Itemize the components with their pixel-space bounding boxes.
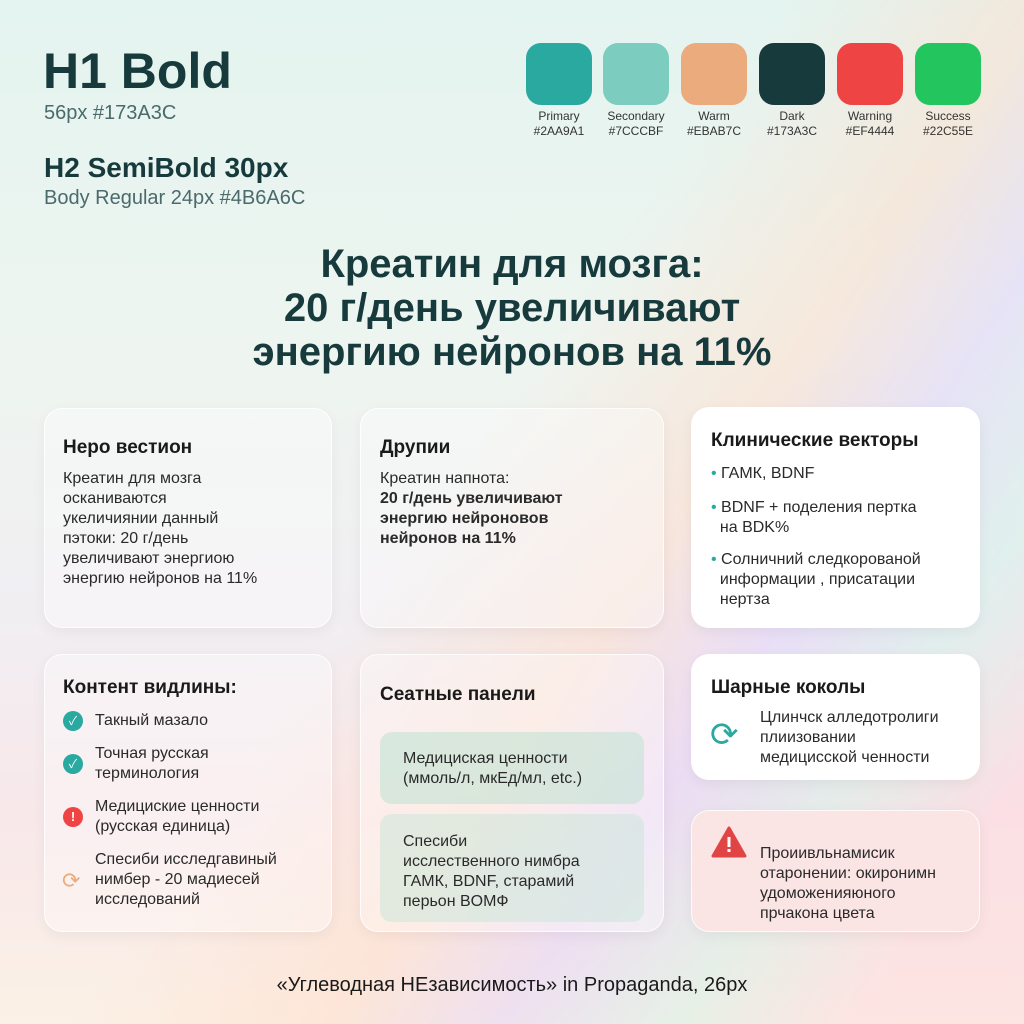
icon: refresh teal: ⟳	[710, 716, 738, 754]
inner panel 1: Медициская ценности	[403, 750, 568, 767]
panel: Контент видлины: (русская единица)	[95, 818, 230, 835]
palette swatches: Success	[925, 109, 971, 123]
panel: Сеатные панели: Сеатные панели	[380, 684, 536, 705]
inner panel 2: ГАМК, BDNF, старамий	[403, 873, 574, 890]
heading: H2 sample: H2 SemiBold 30px	[44, 152, 288, 183]
icon: check	[63, 754, 83, 774]
palette swatches: Secondary	[607, 109, 665, 123]
palette swatches: #22C55E	[923, 124, 973, 138]
palette swatches: #EF4444	[846, 124, 894, 138]
palette swatches	[526, 43, 981, 138]
panel: Контент видлины: Медициские ценности	[95, 798, 259, 815]
palette swatches: Dark	[779, 109, 805, 123]
palette swatches: #7CCCBF	[609, 124, 663, 138]
panel: Шарные коколы	[691, 654, 980, 780]
panel: Клинические векторы: • ГАМК, BDNF	[711, 465, 814, 482]
panel: Шарные коколы: плиизовании	[760, 729, 856, 746]
panel: Клинические векторы: Клинические векторы	[711, 430, 918, 451]
title: 20 г/день увеличивают	[284, 286, 740, 330]
panel: Шарные коколы: Шарные коколы	[711, 677, 865, 698]
panel: Неро вестион: пэтоки: 20 г/день	[63, 530, 188, 547]
panel: Неро вестион: укеличиянии данный	[63, 510, 218, 527]
panel: Контент видлины: Контент видлины:	[63, 677, 237, 698]
icon: alert	[63, 807, 83, 827]
panel: Контент видлины: нимбер - 20 мадиесей	[95, 871, 260, 888]
icon: alert: !	[71, 809, 75, 824]
text: H1 spec: 56px #173A3C	[44, 102, 176, 124]
icon: warning triangle	[712, 826, 747, 858]
panel: Неро вестион	[44, 408, 332, 628]
panel: Клинические векторы: информации , присатации	[720, 571, 915, 588]
heading: H1 sample: H1 Bold	[43, 43, 232, 99]
panel: warning: удоможенияюного	[760, 885, 896, 902]
panel: Контент видлины	[44, 654, 332, 932]
panel: Клинические векторы: • Солничний следкорованой	[711, 551, 921, 568]
icon: check	[63, 711, 83, 731]
panel: Контент видлины: терминология	[95, 765, 199, 782]
footer: «Углеводная НЕзависимость» in Propaganda, 26px	[277, 974, 747, 996]
panel: Шарные коколы: медицисской ченности	[760, 749, 929, 766]
palette swatches: Warning	[848, 109, 892, 123]
panel: Контент видлины: Такный мазало	[95, 712, 208, 729]
inner panel 2	[380, 814, 644, 922]
panel: Сеатные панели	[360, 654, 664, 932]
palette swatches: #2AA9A1	[534, 124, 584, 138]
title: Креатин для мозга:	[320, 242, 704, 286]
panel: Клинические векторы	[691, 407, 980, 628]
panel: Друпии: Друпии	[380, 437, 450, 458]
panel: warning: прчакона цвета	[760, 905, 875, 922]
panel: Неро вестион: увеличивают энергиою	[63, 550, 234, 567]
inner panel 2: перьон BOMФ	[403, 893, 509, 910]
text: body spec: Body Regular 24px #4B6A6C	[44, 187, 305, 209]
panel: Шарные коколы: Цлинчск алледотролиги	[760, 709, 939, 726]
palette swatches: #173A3C	[767, 124, 817, 138]
palette swatches: Primary	[538, 109, 580, 123]
inner panel 1: (ммоль/л, мкЕд/мл, etc.)	[403, 770, 582, 787]
palette swatches: Warm	[698, 109, 730, 123]
inner panel 2: исслественного нимбра	[403, 853, 580, 870]
panel: Контент видлины: Спесиби исследгавиный	[95, 851, 277, 868]
panel: Неро вестион: Креатин для мозга	[63, 470, 201, 487]
icon: check: ✓	[69, 714, 77, 728]
panel: Друпии: энергию нейроновов	[380, 510, 548, 527]
panel: Друпии: нейронов на 11%	[380, 530, 516, 547]
panel: Контент видлины: Точная русская	[95, 745, 209, 762]
panel: warning: отаронении: окиронимн	[760, 865, 936, 882]
panel: Неро вестион: Неро вестион	[63, 437, 192, 458]
panel: Друпии: Креатин напнота:	[380, 470, 509, 487]
panel: Контент видлины: исследований	[95, 891, 200, 908]
panel: Клинические векторы: • BDNF + поделения пертка	[711, 499, 917, 516]
inner panel 2: Спесиби	[403, 833, 467, 850]
panel: warning: Проиивльнамисик	[760, 845, 895, 862]
icon: check: ✓	[69, 757, 77, 771]
title: энергию нейронов на 11%	[252, 330, 771, 374]
panel: Неро вестион: энергию нейронов на 11%	[63, 570, 257, 587]
title	[252, 242, 771, 374]
panel: Друпии	[360, 408, 664, 628]
panel: warning	[691, 810, 980, 932]
panel: Клинические векторы: на BDK%	[720, 519, 789, 536]
inner panel 1	[380, 732, 644, 804]
icon: refresh: ⟳	[62, 868, 80, 893]
panel: Неро вестион: осканиваются	[63, 490, 167, 507]
panel: Друпии: 20 г/день увеличивают	[380, 490, 563, 507]
palette swatches: #EBAB7C	[687, 124, 741, 138]
panel: Клинические векторы: нертза	[720, 591, 770, 608]
